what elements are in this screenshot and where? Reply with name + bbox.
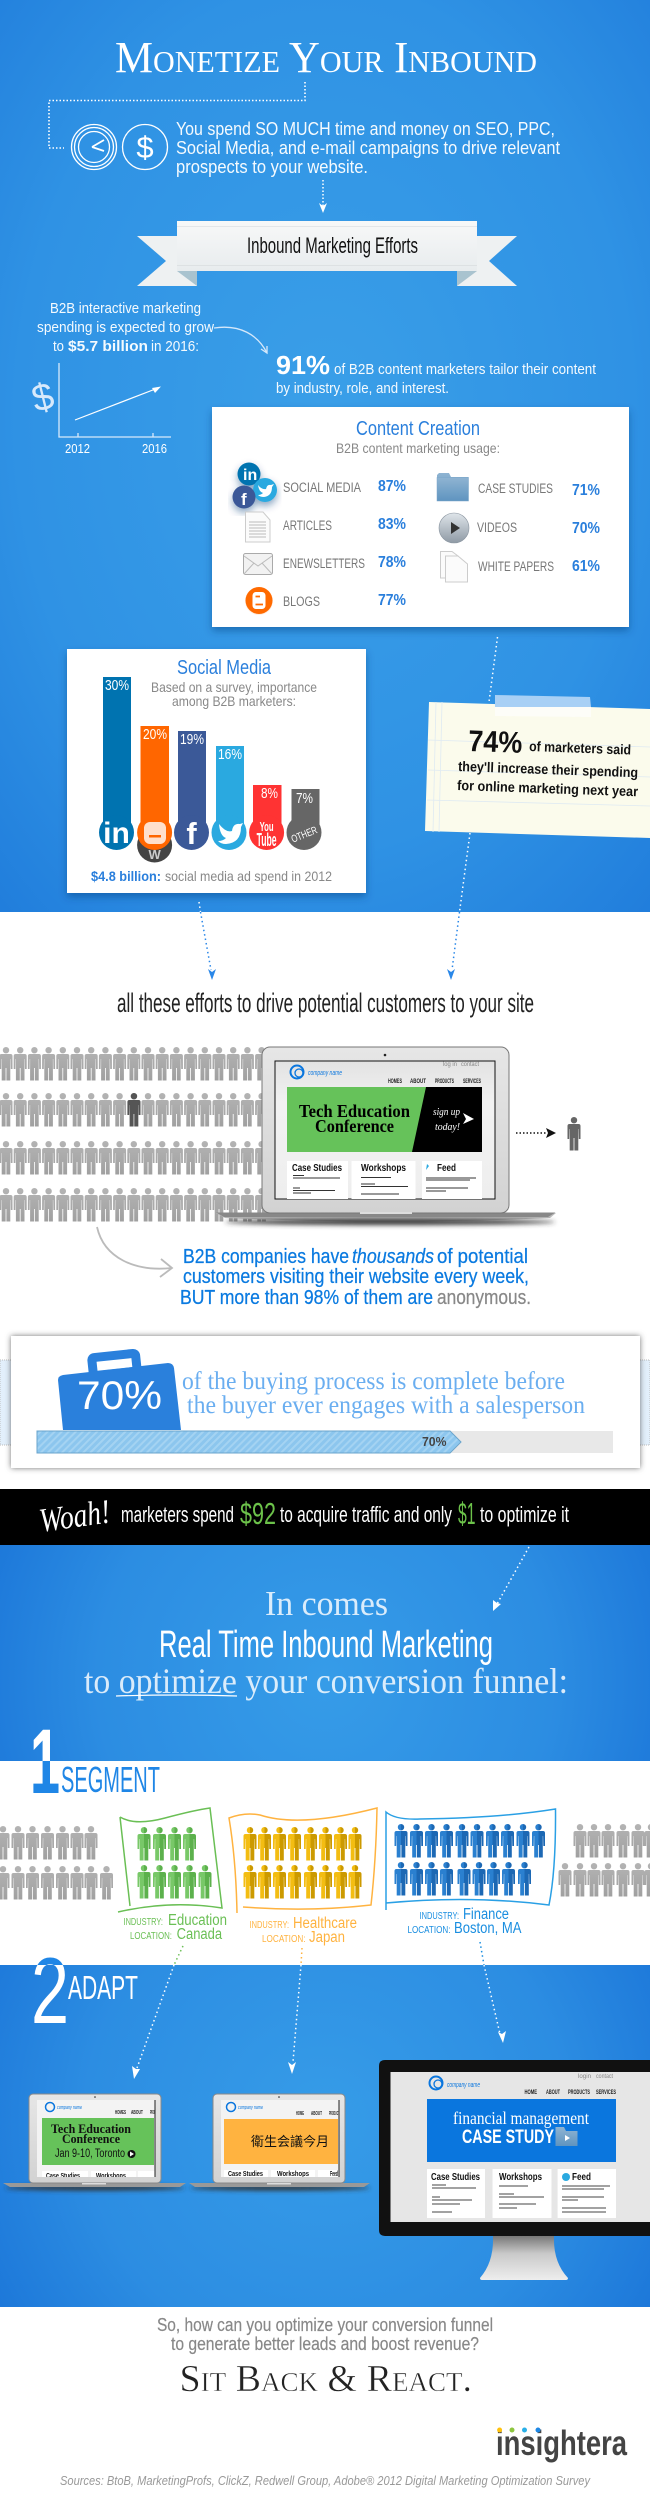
grey people left <box>0 1826 113 1900</box>
subheading: B2B content marketing usage: <box>336 440 500 456</box>
site utility links <box>443 1061 479 1068</box>
icon: social cluster <box>232 462 277 509</box>
list: left column: BLOGS <box>283 594 320 609</box>
laptop: education site: Conference <box>62 2131 120 2146</box>
monitor site header <box>430 2073 616 2096</box>
text: B2B spending: B2B interactive marketing <box>50 301 201 317</box>
step number 1 <box>33 1730 58 1793</box>
grey people right <box>558 1824 650 1896</box>
text: buying process: the buyer ever engages with a salesperson <box>187 1392 585 1419</box>
laptop: education site: company name <box>57 2105 82 2111</box>
laptop: education site: Jan 9-10, Toronto <box>55 2148 125 2160</box>
laptop: healthcare site: PRODUCTS <box>329 2111 341 2117</box>
laptop: education site: Tech Education <box>51 2121 132 2136</box>
social ad spend <box>91 868 332 884</box>
laptop screen <box>275 1061 495 1199</box>
percents: right column: 70% <box>572 520 600 537</box>
laptop: education site: ABOUT <box>131 2110 143 2116</box>
text: in comes: In comes <box>265 1584 388 1623</box>
text: B2B spending: $5.7 billion <box>68 339 148 355</box>
step number 1: 1 <box>30 1711 60 1813</box>
list: right column <box>477 481 554 574</box>
text: B2B spending <box>37 301 214 355</box>
segment: finance: LOCATION: <box>408 1924 450 1936</box>
site cards: Feed <box>437 1163 456 1174</box>
text: B2B spending: in 2016: <box>151 339 199 355</box>
segment: finance: Finance <box>463 1906 509 1923</box>
percents: right column: 71% <box>572 482 600 499</box>
monitor site cards <box>427 2169 616 2218</box>
bar chart: social importance: 7% <box>296 791 313 807</box>
segment: healthcare: LOCATION: <box>262 1933 306 1945</box>
list: left column: ARTICLES <box>283 518 332 533</box>
site cards <box>287 1161 482 1199</box>
percents: left column: 78% <box>378 554 406 571</box>
line chart: spending growth: 2016 <box>142 442 167 456</box>
segment: education: Education <box>168 1912 227 1929</box>
laptop: healthcare site: Workshops <box>277 2169 309 2178</box>
monitor site banner: CASE STUDY <box>462 2127 554 2148</box>
text: B2B spending: spending is expected to grow <box>37 320 214 336</box>
progress bar <box>37 1431 613 1453</box>
closing question: So, how can you optimize your conversion funnel <box>157 2315 493 2335</box>
site hero banner: sign up <box>433 1106 460 1118</box>
icon: dollar: $ <box>136 130 154 165</box>
woah: Woah! <box>37 1493 112 1540</box>
heading: real time inbound marketing: Real Time Inbound Marketing <box>159 1624 493 1666</box>
intro text: You spend SO MUCH time and money on SEO, PPC, <box>176 118 555 139</box>
91% stat: by industry, role, and interest. <box>276 380 449 397</box>
laptop: healthcare site: ABOUT <box>311 2111 322 2117</box>
black band <box>0 1489 650 1545</box>
heading: adapt: ADAPT <box>68 1969 138 2006</box>
dotted connector into note <box>489 637 498 702</box>
monitor site header: contact <box>596 2073 613 2080</box>
title: Monetize Your Inbound <box>115 33 537 82</box>
step number 2: 2 <box>31 1938 69 2043</box>
note text: of marketers said <box>529 738 631 758</box>
monitor site header: ABOUT <box>546 2089 560 2096</box>
step number 2: 2 <box>31 1938 69 2043</box>
percents: left column <box>378 478 406 609</box>
closing question <box>157 2315 493 2354</box>
site cards: Case Studies <box>292 1163 342 1174</box>
line chart: spending growth: $ <box>28 375 58 421</box>
band text: marketers spend <box>121 1502 234 1527</box>
bar chart: social importance: You <box>260 819 274 834</box>
icon: briefcase <box>58 1348 181 1430</box>
icon: envelope <box>244 554 272 574</box>
dotted arrows to sites <box>137 1942 500 2068</box>
intro text: prospects to your website. <box>176 156 368 177</box>
background strip behind panel <box>0 1360 650 1445</box>
arrowheads blue <box>208 969 455 980</box>
dotted arrows white to blue <box>199 833 470 970</box>
crowd of grey people <box>0 1047 268 1222</box>
site hero banner: today! <box>435 1121 460 1133</box>
panel: content creation <box>212 407 629 627</box>
bar chart: social importance: 30% <box>105 678 129 694</box>
heading: segment: SEGMENT <box>61 1759 160 1800</box>
icon: dollar <box>122 124 168 170</box>
list: left column: ENEWSLETTERS <box>283 556 365 571</box>
monitor site header: SERVICES <box>596 2089 616 2096</box>
percents: right column <box>572 482 600 575</box>
ribbon banner <box>137 221 517 286</box>
band text: to optimize it <box>480 1502 569 1527</box>
bar chart: social importance: 16% <box>218 747 242 763</box>
list: right column: CASE STUDIES <box>478 481 553 496</box>
site nav <box>388 1078 481 1085</box>
icon: social cluster: in <box>243 467 257 484</box>
white section: anonymous visitors <box>0 912 650 1489</box>
segment: healthcare <box>229 1808 377 1946</box>
site nav: SERVICES <box>463 1078 481 1085</box>
bar chart: social importance: OTHER <box>290 824 319 846</box>
intro text: Social Media, and e-mail campaigns to drive relevant <box>176 137 560 158</box>
segment: education <box>118 1808 227 1943</box>
laptop: healthcare site: HOME <box>296 2111 304 2117</box>
percents: left column: 87% <box>378 478 406 495</box>
bar chart: social importance: 20% <box>143 727 167 743</box>
91% stat <box>276 350 597 397</box>
band text: to acquire traffic and only <box>280 1502 452 1527</box>
note text: 74% <box>468 725 523 760</box>
segment: finance <box>386 1809 556 1937</box>
text: optimize funnel: to optimize your conversion funnel: <box>84 1661 568 1701</box>
bar chart: social importance: f <box>186 816 197 851</box>
icon: article <box>246 512 270 542</box>
monitor site banner: financial management <box>453 2108 589 2128</box>
laptop: healthcare site: company name <box>238 2105 263 2111</box>
dotted arrow: in comes <box>493 1547 529 1611</box>
site utility links: log in <box>443 1061 457 1068</box>
list: left column: SOCIAL MEDIA <box>283 480 361 495</box>
monitor site header: login <box>578 2073 591 2080</box>
text: buying process <box>182 1368 585 1419</box>
site nav: PRODUCTS <box>435 1078 454 1085</box>
anonymous callout <box>180 1246 531 1309</box>
site logo <box>290 1066 342 1078</box>
site nav: HOMES <box>388 1078 402 1085</box>
segment: finance: Boston, MA <box>454 1920 522 1937</box>
curved grey arrow <box>97 1227 172 1277</box>
monitor site header: company name <box>447 2080 480 2089</box>
white section: segment <box>0 1761 650 1965</box>
segment: education: Canada <box>177 1926 222 1943</box>
laptop: healthcare site: 衛生会議今月 <box>251 2134 329 2149</box>
bar chart: social importance: 19% <box>180 732 204 748</box>
arrow: person leaves <box>516 1128 556 1138</box>
bar chart: social importance: Tube <box>257 830 277 850</box>
heading: social media: Social Media <box>177 656 271 679</box>
laptop: healthcare site: Feed <box>330 2169 338 2178</box>
percents: left column: 77% <box>378 592 406 609</box>
icon: white papers <box>440 552 468 582</box>
text: buying process: of the buying process is complete before <box>182 1368 565 1395</box>
percents: right column: 61% <box>572 558 600 575</box>
monitor site cards: Case Studies <box>431 2172 480 2183</box>
site logo: company name <box>308 1068 342 1077</box>
bar chart: social importance: W <box>148 847 161 862</box>
social ad spend: social media ad spend in 2012 <box>165 868 332 884</box>
heading: content creation: Content Creation <box>356 417 480 440</box>
segment: education: LOCATION: <box>130 1930 172 1942</box>
laptop: education site: Workshops <box>96 2171 126 2180</box>
arrowheads white <box>132 2031 506 2079</box>
monitor site banner <box>427 2099 616 2162</box>
laptop: education site: PRODUCTS <box>150 2110 162 2116</box>
step number 2 <box>34 1958 66 2023</box>
step number 1: 1 <box>30 1711 60 1813</box>
anonymous callout: BUT more than 98% of them are <box>180 1287 433 1309</box>
line chart: spending growth: 2012 <box>65 442 90 456</box>
segment: education: INDUSTRY: <box>124 1916 163 1928</box>
list: right column: VIDEOS <box>477 520 517 535</box>
anonymous callout: thousands <box>352 1246 434 1268</box>
site hero banner: Conference <box>315 1116 394 1136</box>
laptop: education site <box>3 2094 186 2190</box>
icon: clock <box>72 124 116 170</box>
social ad spend: $4.8 billion: <box>91 868 161 884</box>
icon: folder <box>437 473 468 501</box>
site cards: Workshops <box>361 1163 406 1174</box>
icon: social cluster: f <box>241 490 247 509</box>
line chart: spending growth <box>28 363 171 456</box>
site hero banner: Tech Education <box>299 1101 410 1121</box>
anonymous callout: of potential <box>437 1246 528 1268</box>
site hero banner <box>287 1087 482 1152</box>
blue section: adapt <box>0 1965 650 2307</box>
icon: briefcase: 70% <box>77 1374 162 1418</box>
blue section: real time <box>0 1545 650 1761</box>
segment: finance: INDUSTRY: <box>420 1910 459 1922</box>
laptop: healthcare site <box>189 2094 370 2190</box>
intro text <box>176 118 560 177</box>
icon: video <box>439 513 469 543</box>
leaving person <box>568 1117 580 1150</box>
monitor: finance site <box>379 2060 650 2280</box>
dark highlighted person <box>128 1093 140 1126</box>
arrow: curved to 91% <box>214 327 267 353</box>
list: left column <box>283 480 365 609</box>
91% stat: of B2B content marketers tailor their content <box>334 361 597 378</box>
91% stat: 91% <box>276 350 330 380</box>
segment: healthcare: Japan <box>309 1929 345 1946</box>
subheading: survey: Based on a survey, importance <box>151 679 317 695</box>
panel: 70 percent <box>11 1336 640 1468</box>
dotted connector from title <box>49 82 305 148</box>
laptop: education site: HOMES <box>115 2110 126 2116</box>
text: B2B spending: to <box>53 339 64 355</box>
bar chart: social importance: in <box>103 817 130 850</box>
monitor site header: PRODUCTS <box>568 2089 590 2096</box>
ribbon banner: Inbound Marketing Efforts <box>247 233 418 258</box>
anonymous callout: anonymous. <box>437 1287 531 1309</box>
segment: healthcare: Healthcare <box>293 1915 357 1932</box>
band text: $92 <box>240 1496 276 1531</box>
panel: social media <box>67 649 366 893</box>
band text <box>121 1496 569 1531</box>
arrow: intro to ribbon <box>319 180 327 213</box>
laptop: healthcare site: Case Studies <box>228 2169 263 2178</box>
list: right column: WHITE PAPERS <box>478 559 554 574</box>
progress bar: 70% <box>422 1435 446 1449</box>
segment: healthcare: INDUSTRY: <box>250 1919 289 1931</box>
percents: left column: 83% <box>378 516 406 533</box>
anonymous callout: B2B companies have <box>183 1246 349 1268</box>
subheading: survey <box>151 679 317 709</box>
laptop: education site: Case Studies <box>46 2171 80 2180</box>
monitor site cards: Feed <box>572 2172 591 2183</box>
subheading: survey: among B2B marketers: <box>172 693 296 709</box>
bar chart: social importance <box>99 677 322 862</box>
note text <box>457 725 639 799</box>
band text: $1 <box>458 1496 476 1531</box>
icon: blogger <box>245 587 273 615</box>
laptop: main site <box>216 1047 556 1225</box>
sticky note <box>425 695 650 838</box>
anonymous callout: customers visiting their website every week, <box>183 1266 529 1288</box>
monitor site cards: Workshops <box>499 2172 542 2183</box>
monitor site header: HOME <box>524 2089 537 2096</box>
site utility links: contact <box>461 1061 479 1068</box>
closing headline: Sit Back & React. <box>180 2358 472 2400</box>
site nav: ABOUT <box>410 1078 426 1085</box>
blue header background <box>0 0 650 912</box>
bar chart: social importance: 8% <box>261 786 278 802</box>
closing question: to generate better leads and boost revenue? <box>171 2334 479 2354</box>
